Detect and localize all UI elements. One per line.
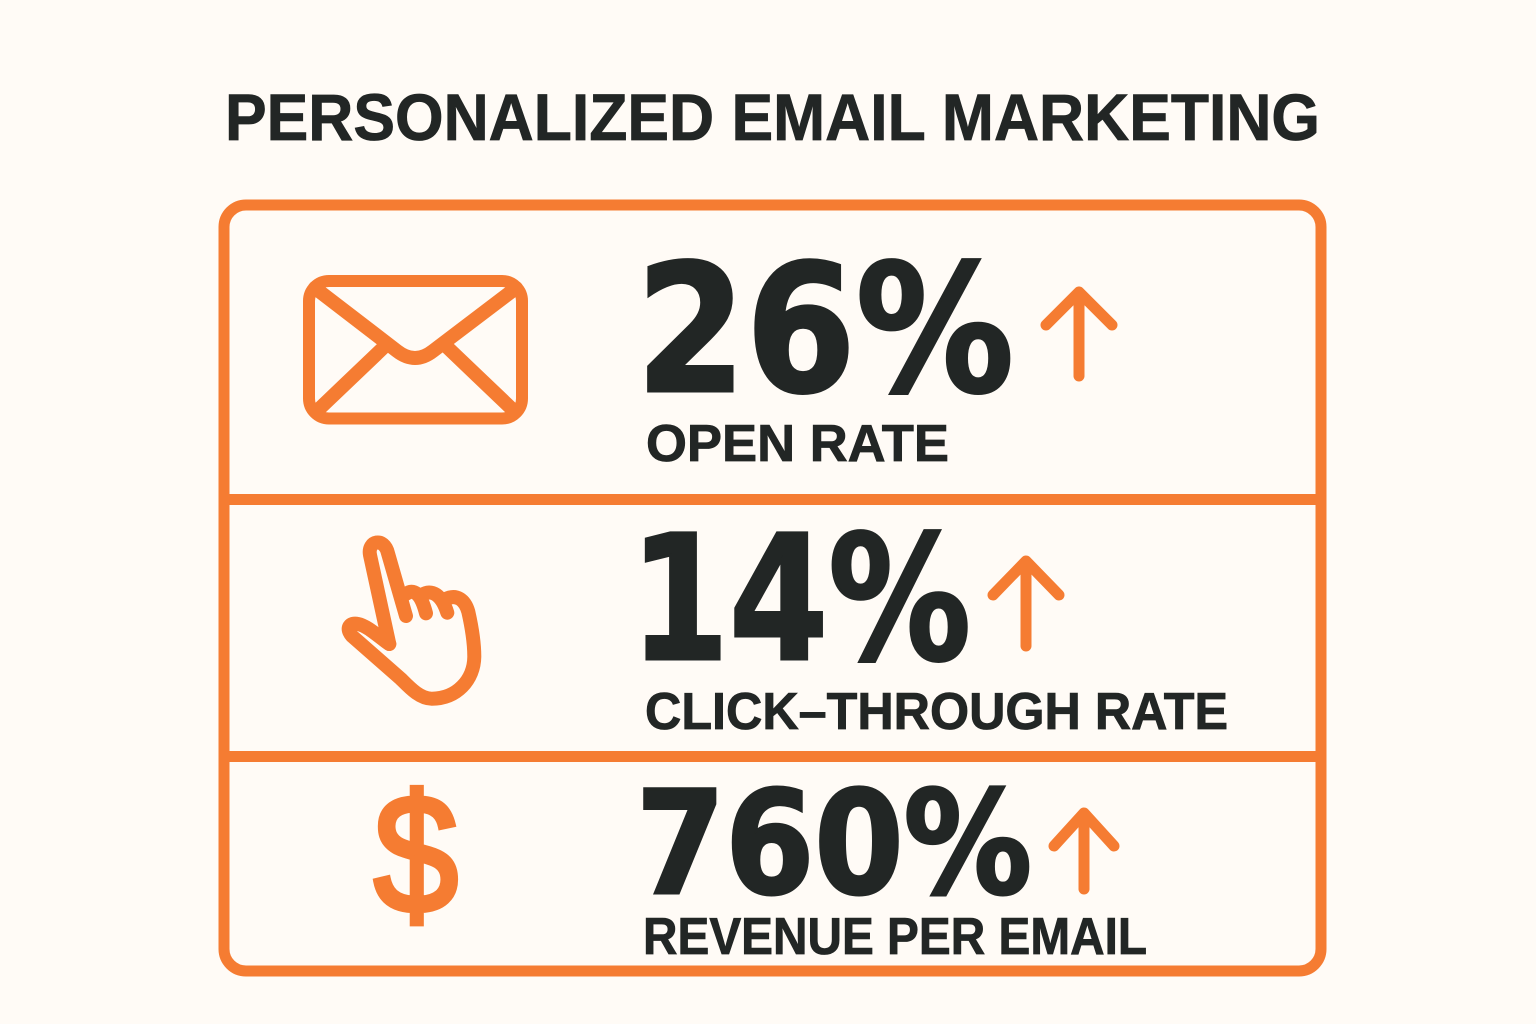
label: revenue per email: REVENUE PER EMAIL xyxy=(643,908,1147,966)
icon: pointing hand xyxy=(349,542,474,699)
label: click-through rate: CLICK–THROUGH RATE xyxy=(645,683,1228,741)
metric: revenue per email xyxy=(636,760,1147,966)
label: open rate: OPEN RATE xyxy=(646,415,949,473)
icon: dollar sign: $ xyxy=(374,760,458,948)
arrow: revenue up xyxy=(1054,813,1114,889)
metric: click-through rate xyxy=(630,498,1228,741)
value: 26%: 26% xyxy=(636,227,1014,433)
title: PERSONALIZED EMAIL MARKETING xyxy=(225,80,1320,154)
panel: metrics card xyxy=(224,205,1321,971)
arrow: click-through up xyxy=(993,561,1059,646)
value: 14%: 14% xyxy=(630,498,971,700)
value: 760%: 760% xyxy=(636,760,1032,927)
icon: envelope xyxy=(309,281,522,418)
arrow: open rate up xyxy=(1046,292,1112,376)
metric: open rate xyxy=(636,227,1112,473)
